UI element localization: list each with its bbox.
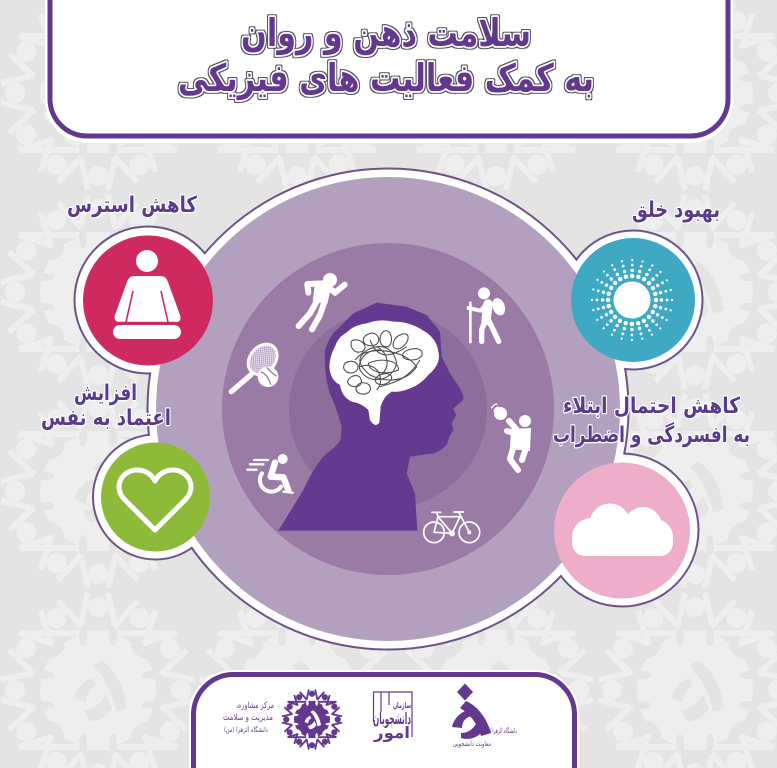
icon: sun of dots: [592, 260, 672, 340]
person silhouette with brain: [278, 303, 464, 531]
logo: Alzahra University student affairs: دانشگاه الزهرا (س): [483, 726, 517, 735]
concentric circles: [156, 177, 620, 641]
label: depression and anxiety: [553, 394, 750, 448]
title: سلامت ذهن و روان: [241, 11, 531, 56]
label: confidence: [41, 381, 171, 431]
logo: student affairs organization: [373, 692, 412, 742]
icon: meditating person: [113, 250, 181, 339]
icon: hiker: [469, 287, 507, 342]
logo: counseling center emblem: [282, 689, 342, 750]
icon: heart: [119, 470, 191, 530]
icon: cloud: [572, 504, 673, 556]
thought tangle: [344, 331, 422, 394]
label: confidence: اعتماد به نفس: [41, 406, 171, 431]
panel: logos footer: دانشجویان: [373, 709, 411, 728]
icon: tennis racket: [231, 338, 283, 392]
panel: depression and anxiety badge: [554, 462, 690, 598]
panel: logos footer: [189, 670, 579, 768]
brain: [329, 320, 439, 425]
logo: counseling center text: دانشگاه الزهرا (س): [224, 725, 268, 734]
title: به کمک فعالیت های فیزیکی: [178, 56, 594, 100]
panel: stress reduction badge: [83, 236, 213, 366]
icon: ball player: [492, 404, 531, 470]
label: stress reduction: کاهش استرس: [67, 193, 197, 218]
icon: wheelchair athlete: [247, 454, 293, 493]
panel: title header: [45, 0, 733, 143]
logo: Alzahra University student affairs: [452, 684, 517, 748]
label: confidence: افزایش: [74, 381, 137, 406]
panel: mood badge: [571, 238, 695, 362]
icon: bicycle: [424, 512, 480, 543]
label: depression and anxiety: کاهش احتمال ابتلاء: [563, 394, 740, 419]
label: mood: بهبود خلق: [632, 198, 720, 223]
panel: confidence badge: [101, 442, 210, 552]
logo: student affairs organization: سازمان: [393, 701, 411, 710]
logo: student affairs organization: امور: [373, 723, 410, 742]
icon: runner: [299, 273, 345, 329]
central circle group outline: [74, 168, 704, 650]
title: [178, 11, 594, 100]
logo: counseling center text: مرکز مشاوره،: [236, 701, 274, 711]
logo: Alzahra University student affairs: معاونت دانشجویی: [453, 740, 491, 748]
logo: counseling center text: مدیریت و سلامت: [223, 713, 273, 723]
logo: counseling center text: [223, 701, 274, 734]
